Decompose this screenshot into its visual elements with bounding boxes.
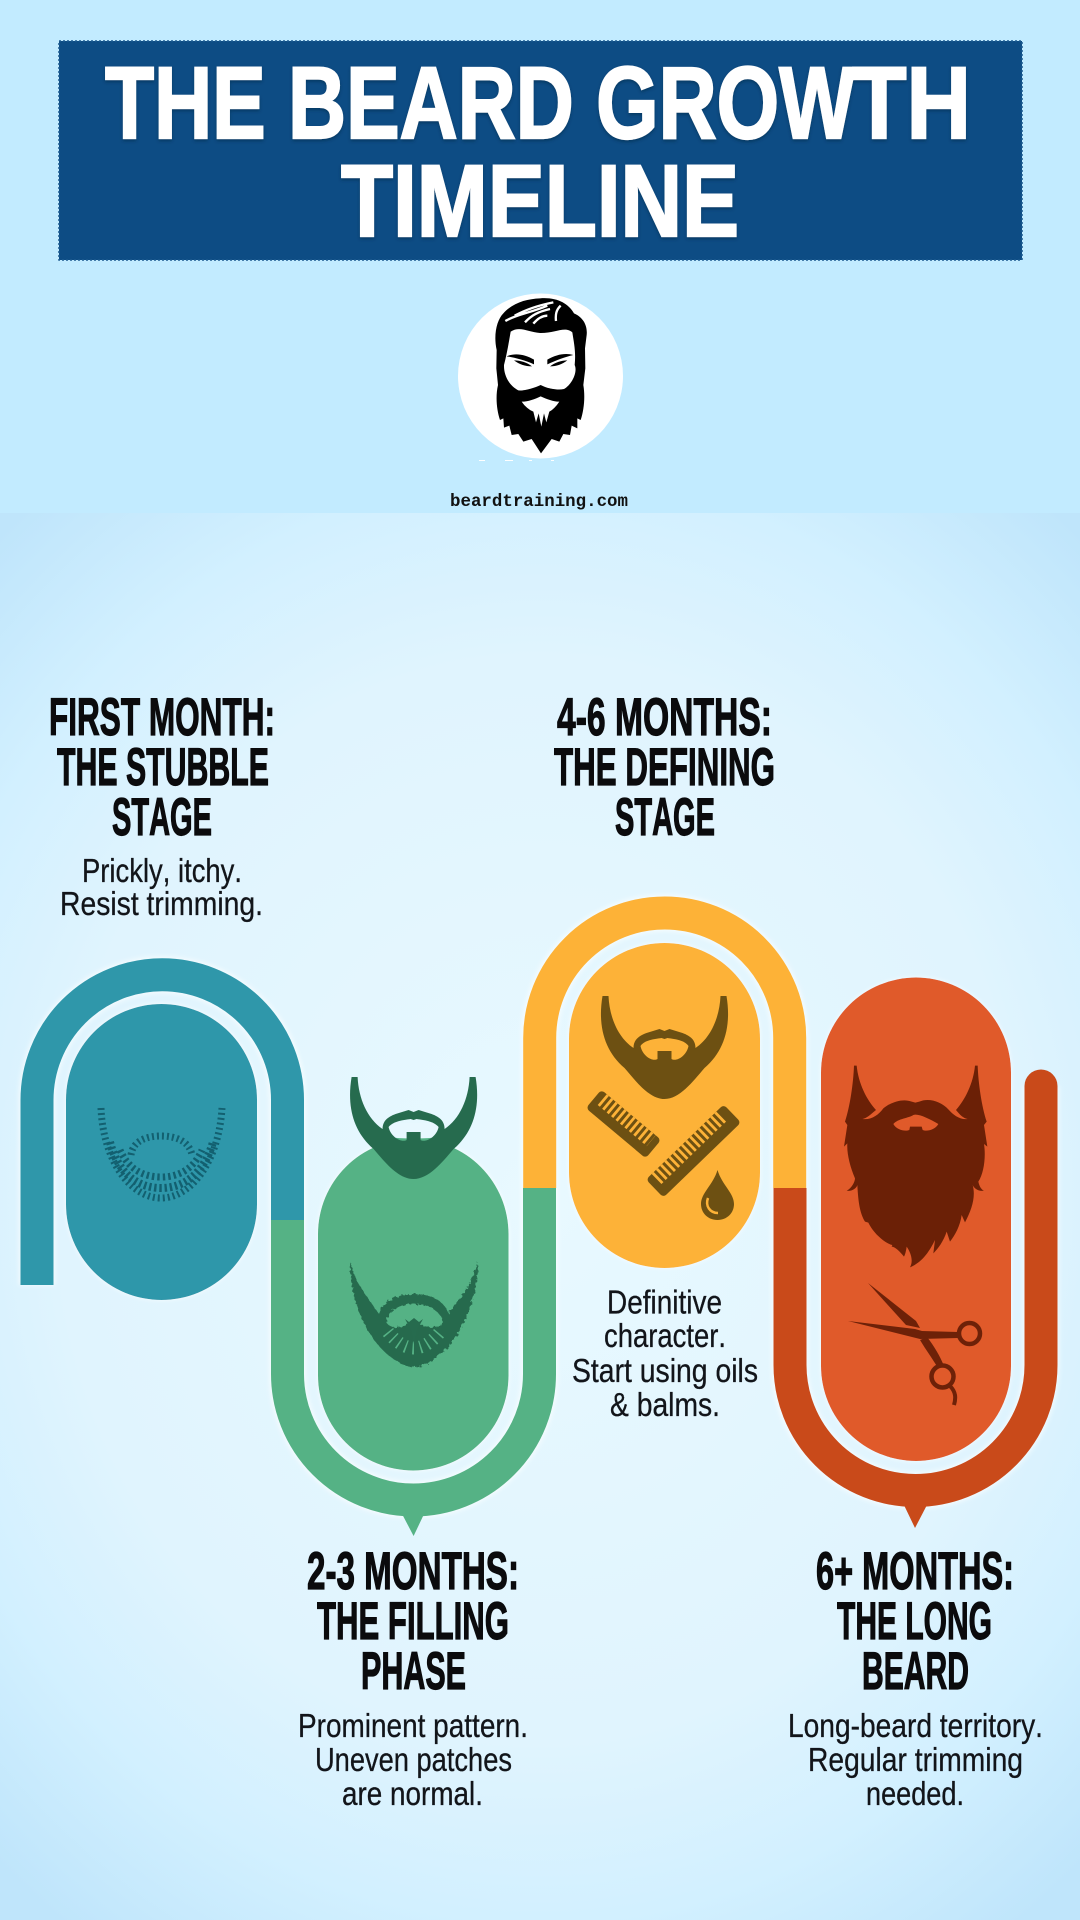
description: 2-3 months: are normal. [342,1775,483,1812]
icon: patchy beard [350,1262,478,1367]
description: first month [60,852,263,922]
orange pill [821,978,1011,1461]
icon: stubble beard [101,1108,222,1198]
teal pill [66,1004,257,1300]
yellow arch band [540,913,790,1188]
title: TIMELINE [341,144,739,258]
icon: oil drop [701,1170,734,1220]
green pill [318,1139,508,1470]
heading: first month: FIRST MONTH: [49,688,275,747]
description: first month: Prickly, itchy. [82,852,242,889]
heading: first month: STAGE [112,788,212,847]
stage 4 panel: 6+ months [788,978,1058,1812]
stage 3 panel: 4-6 months [540,688,790,1423]
icon: defined beard [601,996,728,1099]
stage 2 panel: 2-3 months [288,1077,540,1812]
heading: 2-3 months [307,1542,519,1701]
heading: 4-6 months: THE DEFINING [554,738,775,797]
title: TH [852,46,971,160]
heading: 4-6 months: STAGE [615,788,715,847]
description: first month: Resist trimming. [60,885,263,922]
description: 4-6 months: character. [604,1317,726,1354]
heading: 2-3 months: THE FILLING [317,1592,509,1651]
description: 4-6 months [572,1284,758,1423]
description: 6+ months: Long-beard territory. [788,1707,1043,1744]
stage 1 panel: first month [37,688,288,1300]
title banner [59,41,1022,260]
teal arch band [37,975,288,1285]
icon: filled beard on top [350,1077,477,1179]
icon: long beard [844,1066,987,1267]
website label: beardtraining.com [450,493,628,512]
heading: 4-6 months [554,688,775,847]
description: 4-6 months: & balms. [610,1386,720,1423]
green U band [288,1188,540,1500]
heading: 4-6 months: 4-6 MONTHS: [557,688,772,747]
icon: comb right [646,1104,741,1198]
logo: bearded man in white circle [458,294,623,461]
orange band round end [1024,1070,1058,1102]
orange U band [790,1086,1041,1490]
heading: 6+ months: BEARD [862,1642,969,1701]
heading: 2-3 months: 2-3 MONTHS: [307,1542,519,1601]
description: 6+ months [788,1707,1043,1812]
title [105,46,971,258]
icon: comb left [586,1090,661,1158]
green pointer [401,1512,425,1536]
heading: first month: THE STUBBLE [57,738,269,797]
description: 4-6 months: Start using oils [572,1352,758,1389]
title: THE BEARD GROW [105,46,856,160]
heading: first month [49,688,275,847]
description: 2-3 months [298,1707,528,1812]
description: 6+ months: Regular trimming [808,1741,1023,1778]
description: 2-3 months: Prominent pattern. [298,1707,528,1744]
heading: 6+ months [816,1542,1014,1701]
icon: scissors [848,1283,980,1405]
orange pointer [903,1503,928,1528]
description: 2-3 months: Uneven patches [315,1741,512,1778]
yellow pill [569,943,760,1268]
description: 4-6 months: Definitive [607,1284,722,1320]
heading: 2-3 months: PHASE [361,1642,466,1701]
description: 6+ months: needed. [866,1775,964,1812]
